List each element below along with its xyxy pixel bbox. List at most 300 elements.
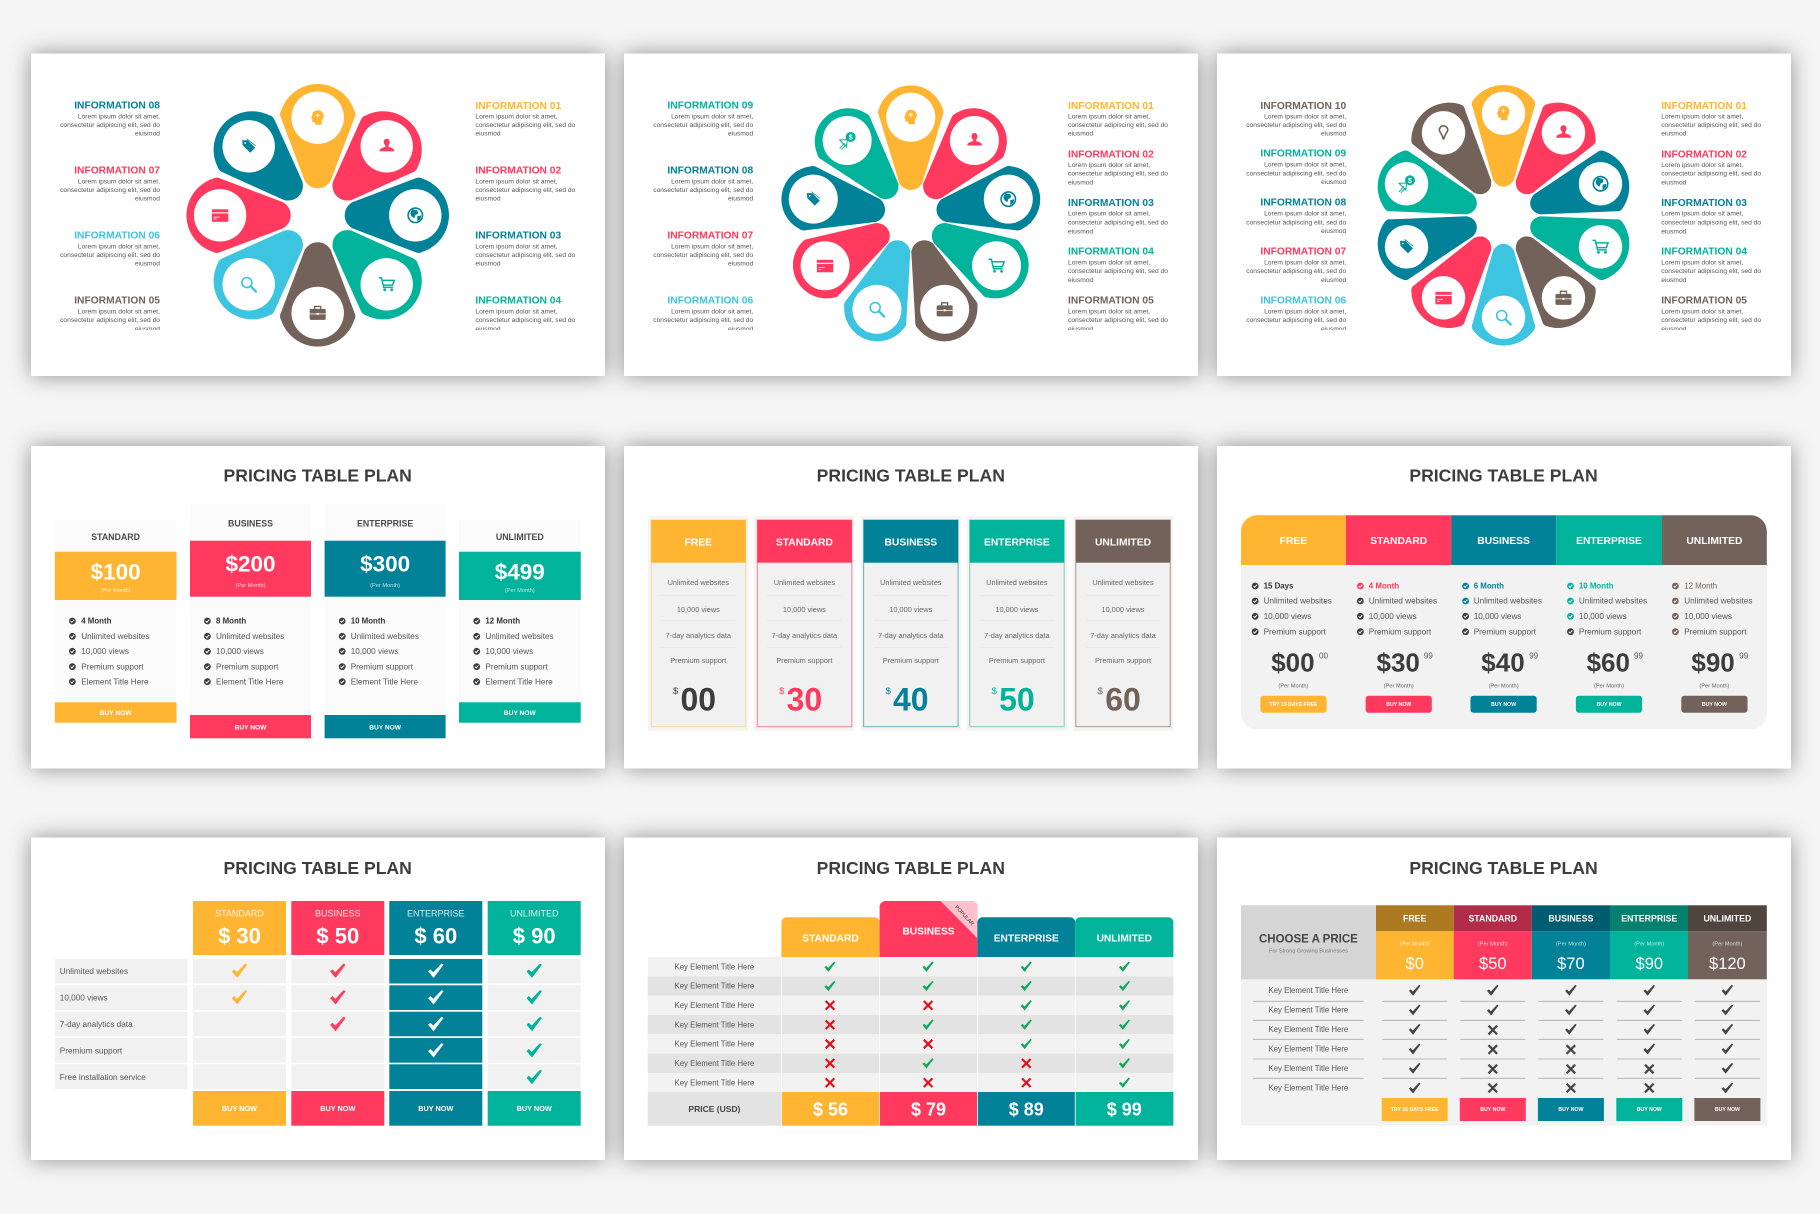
- text: information 03: Lorem ipsum dolor sit amet,: [475, 243, 558, 250]
- text: information 07: eiusmod: [1321, 277, 1346, 284]
- column: business: 6 Month: [1474, 582, 1504, 591]
- text: information 08: [60, 100, 160, 138]
- column: standard: [1346, 515, 1452, 713]
- chart: eight-petal flower: [186, 84, 449, 347]
- column: unlimited: BUY NOW: [1715, 1107, 1740, 1113]
- card: free: 7-day analytics data: [666, 631, 732, 640]
- column: unlimited: UNLIMITED: [1686, 536, 1742, 547]
- column: standard: Premium support: [1369, 627, 1432, 636]
- text: information 06: eiusmod: [135, 261, 160, 268]
- card: enterprise: Premium support: [351, 662, 414, 671]
- card: standard: 30: [787, 682, 822, 718]
- card: business: 40: [893, 682, 929, 718]
- column: unlimited: $ 99: [1107, 1099, 1142, 1119]
- card: business: (Per Month): [235, 583, 266, 589]
- card: business: Premium support: [883, 656, 939, 665]
- column: standard: Unlimited websites: [1369, 597, 1437, 606]
- card: enterprise: BUY NOW: [369, 724, 402, 731]
- card: standard: Premium support: [81, 662, 144, 671]
- petal: information 08: [198, 96, 325, 223]
- title: PRICING TABLE PLAN: [817, 858, 1005, 878]
- text: information 05: INFORMATION 05: [1068, 295, 1154, 306]
- column: free: Premium support: [1264, 627, 1327, 636]
- column: free: $00: [1271, 648, 1315, 678]
- column: unlimited: [1688, 905, 1767, 1121]
- text: information 07: INFORMATION 07: [1260, 247, 1346, 258]
- petal: information 09: [802, 95, 919, 217]
- text: information 03: Lorem ipsum dolor sit amet,: [1661, 211, 1743, 218]
- card: enterprise: 50: [999, 682, 1035, 718]
- column: enterprise: 10 Month: [1579, 582, 1614, 591]
- text: information 09: [653, 100, 753, 138]
- column: business: BUY NOW: [1558, 1107, 1583, 1113]
- petal: information 05: [889, 230, 986, 351]
- text: information 08: eiusmod: [1321, 228, 1346, 235]
- column: enterprise: 99: [1634, 651, 1643, 660]
- column: standard: 99: [1424, 651, 1433, 660]
- petal: information 06: [835, 230, 933, 351]
- card: business: 10,000 views: [889, 605, 933, 614]
- table rows: Key Element Title Here: [675, 1001, 754, 1010]
- panel: pricing cards with outlined columns: [624, 446, 1198, 768]
- column: enterprise: [389, 901, 482, 1126]
- text: information 04: Lorem ipsum dolor sit amet,: [1661, 259, 1743, 266]
- petal: information 10: [1401, 91, 1512, 211]
- card: standard: [754, 516, 854, 731]
- petal: information 09: $: [849, 134, 853, 141]
- row labels: [55, 959, 188, 1089]
- card: free: [648, 516, 748, 731]
- text: information 01: eiusmod: [1068, 130, 1093, 137]
- column: unlimited: UNLIMITED: [510, 908, 559, 918]
- card: standard: Unlimited websites: [81, 632, 149, 641]
- column: standard: BUY NOW: [1386, 702, 1411, 708]
- table rows: Key Element Title Here: [675, 1078, 754, 1087]
- column: business: $ 50: [316, 923, 359, 948]
- column: business: [291, 901, 384, 1126]
- row labels: Key Element Title Here: [1269, 1064, 1348, 1073]
- text: information 04: Lorem ipsum dolor sit amet,: [475, 308, 558, 315]
- petal: information 01: [878, 85, 944, 190]
- title: PRICING TABLE PLAN: [817, 466, 1005, 486]
- column: unlimited: UNLIMITED: [1097, 934, 1152, 945]
- card: free: Premium support: [670, 656, 726, 665]
- column: standard: [1454, 905, 1532, 1121]
- text: information 05: [1068, 296, 1168, 330]
- petal: information 04: [1521, 194, 1637, 286]
- card: standard: $: [779, 686, 785, 697]
- column: enterprise: (Per Month): [1594, 683, 1624, 689]
- card: enterprise: [325, 504, 446, 738]
- text: information 01: eiusmod: [475, 130, 501, 137]
- card: unlimited: $: [1098, 686, 1104, 697]
- text: information 03: consectetur adipiscing elit, sed do: [1661, 220, 1761, 227]
- card: unlimited: $499: [495, 559, 545, 584]
- column: unlimited: [1662, 515, 1767, 713]
- text: information 04: [1068, 247, 1168, 284]
- card: business: $: [886, 686, 892, 697]
- card: free: 10,000 views: [677, 605, 720, 614]
- column: free: Unlimited websites: [1264, 597, 1332, 606]
- card: unlimited: Unlimited websites: [1092, 578, 1154, 587]
- text: information 02: consectetur adipiscing elit, sed do: [1068, 171, 1168, 178]
- card: unlimited: Premium support: [1095, 656, 1151, 665]
- column: unlimited: [488, 901, 581, 1126]
- card: standard: 10,000 views: [783, 605, 826, 614]
- text: information 08: Lorem ipsum dolor sit amet,: [78, 113, 160, 120]
- row labels: [1253, 986, 1364, 1093]
- card: enterprise: Premium support: [989, 656, 1045, 665]
- column: business: Unlimited websites: [1474, 597, 1542, 606]
- text: information 01: Lorem ipsum dolor sit amet,: [1661, 114, 1743, 121]
- column: enterprise: ENTERPRISE: [1576, 536, 1642, 547]
- card: unlimited: 12 Month: [485, 617, 520, 626]
- card: standard: 10,000 views: [81, 647, 129, 656]
- column: business: BUY NOW: [320, 1104, 355, 1113]
- text: information 05: [60, 296, 160, 330]
- card: unlimited: 10,000 views: [1102, 605, 1145, 614]
- text: information 08: consectetur adipiscing elit, sed do: [653, 187, 753, 194]
- column: unlimited: 99: [1739, 651, 1749, 660]
- text: information 02: Lorem ipsum dolor sit amet,: [1068, 162, 1150, 169]
- column: standard: STANDARD: [802, 934, 859, 945]
- text: information 10: INFORMATION 10: [1260, 101, 1346, 112]
- row labels: Free installation service: [60, 1073, 146, 1082]
- column: standard: STANDARD: [215, 908, 264, 918]
- text: information 04: INFORMATION 04: [1661, 247, 1747, 258]
- row labels: Key Element Title Here: [1269, 1025, 1348, 1034]
- text: information 07: consectetur adipiscing elit, sed do: [1246, 268, 1346, 275]
- card: free: Unlimited websites: [668, 578, 729, 587]
- table rows: Key Element Title Here: [675, 1020, 754, 1029]
- text: information 03: consectetur adipiscing elit, sed do: [475, 252, 576, 259]
- column: standard: BUY NOW: [222, 1104, 257, 1113]
- column: enterprise: $60: [1587, 648, 1630, 678]
- column: unlimited: Premium support: [1684, 627, 1747, 636]
- column: unlimited: (Per Month): [1699, 683, 1730, 689]
- column: free: FREE: [1403, 914, 1427, 924]
- petal: information 09: $: [1408, 178, 1412, 185]
- text: information 01: [475, 101, 576, 137]
- column: enterprise: BUY NOW: [1637, 1107, 1662, 1113]
- petal: information 03: [345, 178, 449, 253]
- panel: feature comparison table with tick columns: [31, 838, 605, 1160]
- text: information 06: [1246, 296, 1346, 330]
- card: business: [860, 516, 961, 731]
- text: information 05: consectetur adipiscing elit, sed do: [1068, 317, 1168, 324]
- column: unlimited: $120: [1709, 955, 1746, 973]
- text: information 02: INFORMATION 02: [1068, 149, 1154, 160]
- column: free: [1376, 905, 1454, 1121]
- text: information 02: consectetur adipiscing elit, sed do: [475, 187, 576, 194]
- card: unlimited: 7-day analytics data: [1090, 631, 1157, 640]
- table rows: Key Element Title Here: [675, 982, 754, 991]
- column: enterprise: [977, 917, 1075, 1126]
- column: unlimited: 10,000 views: [1684, 612, 1732, 621]
- text: information 05: consectetur adipiscing elit, sed do: [60, 317, 160, 324]
- text: information 08: consectetur adipiscing elit, sed do: [60, 122, 160, 129]
- card: enterprise: ENTERPRISE: [984, 537, 1050, 548]
- column: business: BUSINESS: [1477, 536, 1530, 547]
- text: information 08: consectetur adipiscing elit, sed do: [1246, 219, 1346, 226]
- text: information 07: INFORMATION 07: [74, 165, 160, 176]
- text: information 04: eiusmod: [1068, 277, 1093, 284]
- card: enterprise: ENTERPRISE: [357, 519, 413, 529]
- column: unlimited: UNLIMITED: [1703, 914, 1751, 924]
- petal: information 07: [781, 201, 904, 310]
- text: information 09: consectetur adipiscing elit, sed do: [653, 122, 753, 129]
- text: information 02: Lorem ipsum dolor sit amet,: [475, 178, 558, 185]
- card: standard: STANDARD: [776, 537, 833, 548]
- text: information 01: consectetur adipiscing elit, sed do: [1661, 122, 1761, 129]
- petal: information 08: [1370, 194, 1486, 286]
- column: enterprise: Premium support: [1579, 627, 1642, 636]
- table rows: [648, 957, 1173, 1092]
- petal: information 09: [1370, 145, 1486, 237]
- text: information 02: [475, 165, 576, 203]
- text: information 09: Lorem ipsum dolor sit amet,: [671, 113, 753, 120]
- card: unlimited: [1073, 516, 1173, 731]
- column: enterprise: $ 89: [1009, 1099, 1044, 1119]
- row labels: Key Element Title Here: [1269, 1045, 1348, 1054]
- column: business: BUY NOW: [1491, 702, 1516, 708]
- text: information 03: [1661, 198, 1761, 235]
- text: information 06: Lorem ipsum dolor sit amet,: [1264, 308, 1346, 315]
- petal: information 06: [198, 208, 325, 335]
- text: information 07: INFORMATION 07: [667, 230, 753, 241]
- card: business: Element Title Here: [216, 677, 284, 686]
- panel: eight-petal infographic: [60, 84, 576, 346]
- petal: information 05: [1495, 220, 1606, 339]
- column: unlimited: (Per Month): [1712, 942, 1743, 948]
- column: standard: 10,000 views: [1369, 612, 1417, 621]
- text: information 09: eiusmod: [1321, 179, 1346, 186]
- text: information 08: [1246, 198, 1346, 235]
- text: information 09: INFORMATION 09: [667, 100, 753, 111]
- text: information 02: consectetur adipiscing elit, sed do: [1661, 171, 1761, 178]
- text: information 01: [1661, 101, 1761, 137]
- row labels: 7-day analytics data: [60, 1020, 133, 1029]
- text: information 03: consectetur adipiscing elit, sed do: [1068, 220, 1168, 227]
- panel: rounded pricing table: [1217, 446, 1791, 768]
- column: enterprise: Unlimited websites: [1579, 597, 1647, 606]
- title: PRICING TABLE PLAN: [1409, 466, 1598, 486]
- text: information 06: consectetur adipiscing elit, sed do: [653, 317, 753, 324]
- column: business: 99: [1529, 651, 1539, 660]
- text: information 08: [653, 165, 753, 203]
- card: unlimited: UNLIMITED: [1095, 537, 1151, 548]
- column: free: $0: [1406, 955, 1424, 973]
- column: free: FREE: [1280, 536, 1307, 547]
- text: information 09: eiusmod: [728, 131, 753, 138]
- card: business: [190, 504, 311, 738]
- text: information 01: INFORMATION 01: [475, 101, 561, 112]
- column: unlimited: 12 Month: [1684, 582, 1717, 591]
- card: business: 8 Month: [216, 617, 246, 626]
- column: free: [1241, 515, 1346, 713]
- petal: information 05: [280, 242, 355, 347]
- petal: information 01: [280, 84, 355, 188]
- heading: choose a price: For Strong Growing Businesses: [1269, 949, 1348, 955]
- petal: information 04: [917, 201, 1041, 310]
- table rows: Key Element Title Here: [675, 1059, 754, 1068]
- title: PRICING TABLE PLAN: [1409, 858, 1598, 878]
- card: unlimited: Unlimited websites: [485, 632, 554, 641]
- column: free: TRY 15 DAYS FREE: [1391, 1107, 1439, 1113]
- text: information 07: Lorem ipsum dolor sit amet,: [78, 178, 160, 185]
- text: information 08: INFORMATION 08: [74, 100, 160, 111]
- card: standard: Premium support: [776, 656, 832, 665]
- text: information 06: consectetur adipiscing elit, sed do: [1246, 317, 1346, 324]
- text: information 04: Lorem ipsum dolor sit amet,: [1068, 259, 1150, 266]
- price label: [648, 1092, 781, 1126]
- text: information 06: [654, 296, 753, 330]
- card: free: 00: [681, 682, 716, 718]
- column: business: Premium support: [1474, 627, 1537, 636]
- column: enterprise: ENTERPRISE: [1621, 914, 1678, 924]
- text: information 05: eiusmod: [135, 326, 160, 333]
- card: business: Premium support: [216, 662, 279, 671]
- text: information 04: INFORMATION 04: [1068, 247, 1154, 258]
- column: business: BUSINESS: [902, 926, 955, 937]
- panel: choose a price table: [1217, 838, 1791, 1160]
- text: information 08: Lorem ipsum dolor sit amet,: [671, 178, 753, 185]
- row labels: Key Element Title Here: [1269, 1084, 1348, 1093]
- price label: PRICE (USD): [688, 1104, 741, 1114]
- column: standard: $50: [1479, 955, 1507, 973]
- column: business: BUSINESS: [1548, 914, 1594, 924]
- text: information 03: [1068, 198, 1168, 235]
- text: information 06: Lorem ipsum dolor sit amet,: [78, 243, 160, 250]
- text: information 05: eiusmod: [1068, 326, 1093, 333]
- card: unlimited: Premium support: [485, 662, 548, 671]
- column: unlimited: [1075, 917, 1173, 1126]
- text: information 06: INFORMATION 06: [1260, 295, 1346, 306]
- row labels: 10,000 views: [60, 993, 108, 1002]
- column: standard: STANDARD: [1468, 914, 1517, 924]
- column: business: (Per Month): [1556, 942, 1586, 948]
- card: standard: (Per Month): [101, 588, 131, 594]
- card: enterprise: 7-day analytics data: [984, 631, 1051, 640]
- text: information 04: consectetur adipiscing elit, sed do: [1661, 268, 1761, 275]
- text: information 06: eiusmod: [1321, 326, 1346, 333]
- text: information 04: eiusmod: [1661, 277, 1687, 284]
- text: information 02: [1068, 149, 1168, 187]
- text: information 07: eiusmod: [135, 196, 160, 203]
- text: information 08: eiusmod: [728, 196, 753, 203]
- text: information 05: Lorem ipsum dolor sit amet,: [78, 308, 160, 315]
- text: information 05: eiusmod: [1661, 326, 1687, 333]
- card: unlimited: [459, 519, 581, 723]
- column: business: $40: [1481, 648, 1525, 678]
- text: information 05: INFORMATION 05: [74, 295, 160, 306]
- card: standard: Unlimited websites: [774, 578, 835, 587]
- card: standard: 4 Month: [81, 617, 112, 626]
- text: information 03: [475, 230, 576, 268]
- table rows: Key Element Title Here: [675, 962, 754, 971]
- column: standard: [781, 917, 880, 1126]
- petal: information 03: [1521, 145, 1637, 237]
- heading: choose a price: [1241, 905, 1376, 979]
- text: information 04: consectetur adipiscing elit, sed do: [1068, 268, 1168, 275]
- column: enterprise: $90: [1636, 955, 1663, 973]
- text: information 06: INFORMATION 06: [667, 295, 753, 306]
- panel: pricing cards with staggered columns: [31, 446, 605, 768]
- panel: ten-petal infographic: [1246, 85, 1761, 346]
- card: unlimited: BUY NOW: [504, 710, 536, 717]
- text: information 02: INFORMATION 02: [1661, 149, 1747, 160]
- petal: information 04: [310, 208, 437, 335]
- text: information 05: consectetur adipiscing elit, sed do: [1661, 317, 1761, 324]
- card: standard: STANDARD: [91, 532, 140, 542]
- text: information 02: eiusmod: [475, 196, 501, 203]
- text: information 10: consectetur adipiscing elit, sed do: [1246, 122, 1346, 129]
- column: unlimited: $90: [1691, 648, 1735, 678]
- column: free: (Per Month): [1400, 942, 1430, 948]
- chart: nine-petal flower: [776, 85, 1045, 351]
- card: business: Unlimited websites: [216, 632, 284, 641]
- petal: information 03: [931, 161, 1045, 244]
- card: free: FREE: [685, 537, 712, 548]
- text: information 01: consectetur adipiscing elit, sed do: [475, 122, 576, 129]
- row labels: Key Element Title Here: [1269, 986, 1348, 995]
- card: business: BUY NOW: [235, 724, 267, 731]
- column: unlimited: BUY NOW: [517, 1104, 552, 1113]
- text: information 10: eiusmod: [1321, 130, 1346, 137]
- column: standard: $30: [1376, 648, 1420, 678]
- card: enterprise: Unlimited websites: [351, 632, 419, 641]
- text: information 10: [1246, 101, 1346, 137]
- column: enterprise: (Per Month): [1634, 942, 1664, 948]
- card: enterprise: 10,000 views: [995, 605, 1039, 614]
- text: information 01: Lorem ipsum dolor sit amet,: [1068, 114, 1150, 121]
- text: information 03: eiusmod: [1068, 228, 1093, 235]
- column: business: 10,000 views: [1474, 612, 1521, 621]
- card: enterprise: Unlimited websites: [986, 578, 1048, 587]
- column: enterprise: ENTERPRISE: [407, 908, 465, 918]
- text: information 09: consectetur adipiscing elit, sed do: [1246, 170, 1346, 177]
- text: information 09: Lorem ipsum dolor sit amet,: [1264, 161, 1346, 168]
- text: information 08: eiusmod: [135, 131, 160, 138]
- text: information 09: INFORMATION 09: [1260, 149, 1346, 160]
- card: standard: Element Title Here: [81, 677, 149, 686]
- panel: feature table with popular ribbon: [624, 838, 1198, 1160]
- row labels: Premium support: [60, 1046, 123, 1055]
- card: enterprise: 10,000 views: [351, 647, 398, 656]
- card: standard: 7-day analytics data: [772, 631, 838, 640]
- petal: information 06: [1472, 244, 1535, 346]
- column: unlimited: Unlimited websites: [1684, 597, 1752, 606]
- column: enterprise: BUY NOW: [1597, 702, 1622, 708]
- petal: information 08: [776, 161, 891, 244]
- text: information 04: INFORMATION 04: [475, 295, 561, 306]
- text: information 04: eiusmod: [475, 326, 501, 333]
- text: information 06: [60, 230, 160, 268]
- column: business: (Per Month): [1489, 683, 1519, 689]
- text: information 07: consectetur adipiscing elit, sed do: [653, 252, 753, 259]
- text: information 02: eiusmod: [1661, 180, 1687, 187]
- text: information 01: consectetur adipiscing elit, sed do: [1068, 122, 1168, 129]
- column: standard: [193, 901, 286, 1126]
- card: standard: $100: [91, 559, 141, 584]
- text: information 03: eiusmod: [475, 261, 501, 268]
- column: free: TRY 15 DAYS FREE: [1269, 702, 1318, 708]
- card: enterprise: 10 Month: [351, 617, 386, 626]
- column: business: $ 79: [911, 1099, 946, 1119]
- text: information 03: eiusmod: [1661, 228, 1687, 235]
- row labels: Key Element Title Here: [1269, 1006, 1348, 1015]
- column: business: $70: [1557, 955, 1585, 973]
